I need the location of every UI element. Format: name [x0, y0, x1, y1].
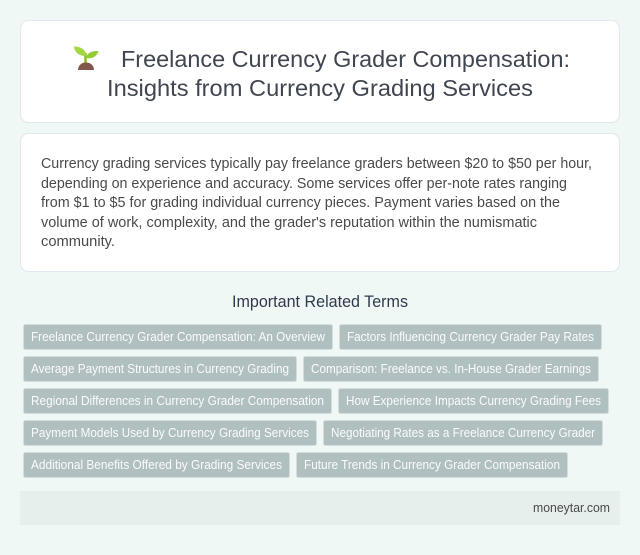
tag	[24, 388, 332, 414]
tag: Regional Differences in Currency Grader Compensation	[31, 393, 324, 408]
tag	[304, 356, 598, 382]
tag: How Experience Impacts Currency Grading Fees	[346, 393, 601, 408]
tag	[296, 452, 568, 478]
title: Insights from Currency Grading Services	[107, 75, 533, 101]
title	[107, 46, 570, 101]
tag: Comparison: Freelance vs. In-House Grader Earnings	[311, 361, 591, 376]
paragraph: volume of work, complexity, and the grader's reputation within the numismatic	[41, 214, 537, 231]
paragraph: from $1 to $5 for grading individual currency pieces. Payment varies based on the	[41, 194, 560, 211]
panel: summary text	[20, 134, 620, 272]
tag: Average Payment Structures in Currency Grading	[31, 361, 289, 376]
panel: header	[20, 20, 620, 122]
heading: related terms: Important Related Terms	[232, 293, 408, 311]
tag	[24, 356, 296, 382]
title: Freelance Currency Grader Compensation:	[121, 46, 570, 72]
footer source: moneytar.com	[533, 500, 610, 515]
tag	[24, 324, 332, 350]
footer	[20, 491, 620, 525]
paragraph	[41, 155, 592, 250]
tag: Factors Influencing Currency Grader Pay Rates	[347, 329, 594, 344]
icon: seedling	[74, 46, 98, 70]
paragraph: depending on experience and accuracy. Some services offer per-note rates ranging	[41, 175, 567, 192]
paragraph: community.	[41, 233, 115, 250]
tag: Freelance Currency Grader Compensation: An Overview	[31, 329, 326, 344]
tag	[24, 452, 290, 478]
tag	[340, 324, 602, 350]
tag: Future Trends in Currency Grader Compensation	[304, 457, 560, 472]
tag	[338, 388, 608, 414]
paragraph: Currency grading services typically pay freelance graders between $20 to $50 per hour,	[41, 155, 592, 172]
tag	[24, 420, 316, 446]
tag: Additional Benefits Offered by Grading Services	[31, 457, 282, 472]
tag list	[24, 324, 608, 478]
tag	[324, 420, 602, 446]
tag: Payment Models Used by Currency Grading Services	[31, 425, 309, 440]
tag: Negotiating Rates as a Freelance Currency Grader	[331, 425, 596, 440]
